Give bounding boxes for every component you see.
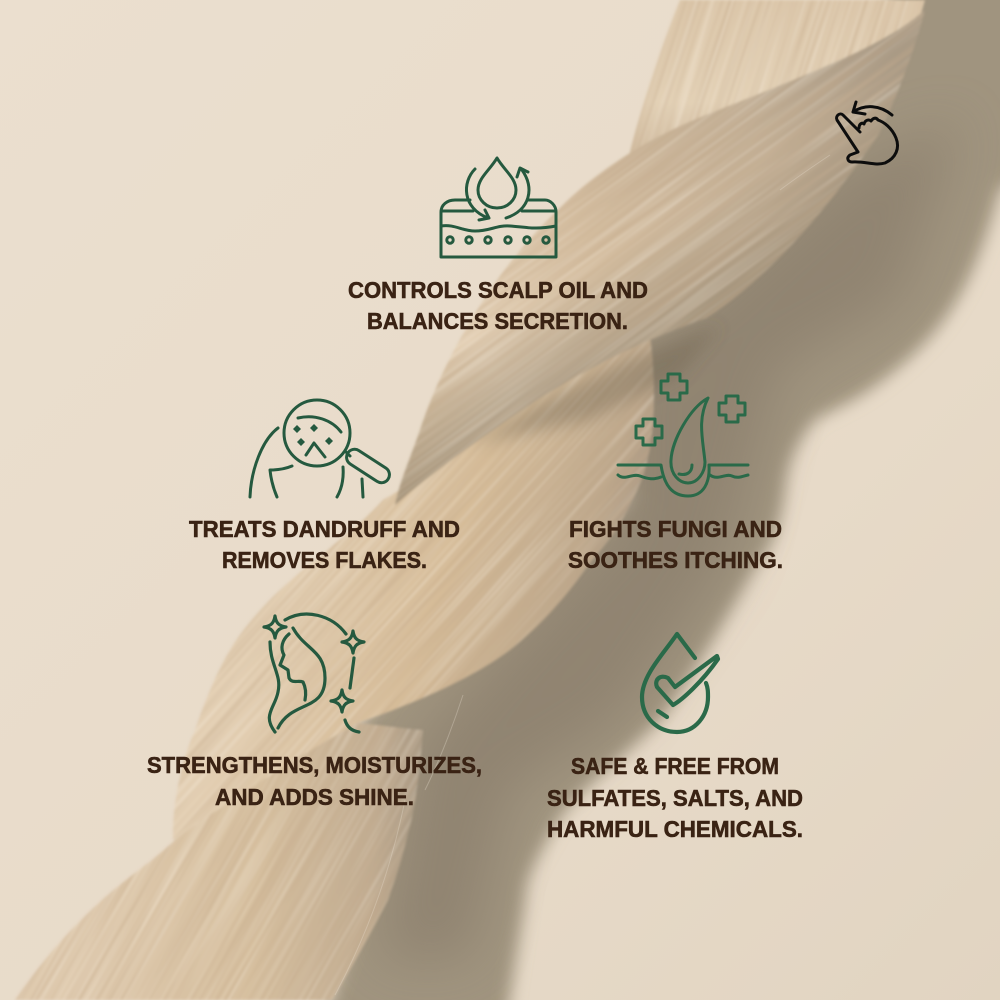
strand: top (628, 0, 925, 160)
shadow cast by diagonal band (470, 325, 720, 445)
icon: magnifier over scalp (250, 400, 392, 497)
text: fungi (568, 516, 783, 573)
text: safe and free: SAFE & FREE FROM (571, 753, 779, 779)
icon: woman profile with sparkles (264, 614, 364, 732)
icon: hair follicle with crosses (618, 374, 748, 496)
stray hair highlights (335, 155, 830, 995)
text: fungi: SOOTHES ITCHING. (568, 547, 783, 573)
text: strengthens: STRENGTHENS, MOISTURIZES, (147, 752, 482, 778)
text: fungi: FIGHTS FUNGI AND (569, 516, 782, 542)
strand: diagonal band (395, 10, 925, 505)
icon: drop with check (642, 634, 718, 732)
text: strengthens (147, 752, 482, 810)
text: safe and free: SULFATES, SALTS, AND (547, 785, 803, 811)
text: dandruff: REMOVES FLAKES. (222, 547, 427, 573)
hair shadow (320, 0, 1000, 1000)
text: dandruff (189, 516, 460, 573)
text: dandruff: TREATS DANDRUFF AND (189, 516, 460, 542)
text: safe and free (547, 753, 803, 842)
icon: swipe hand (837, 102, 898, 164)
strand: middle (173, 335, 654, 840)
text: safe and free: HARMFUL CHEMICALS. (547, 816, 803, 842)
heading: scalp oil (348, 277, 648, 334)
heading: scalp oil: BALANCES SECRETION. (367, 308, 628, 334)
heading: scalp oil: CONTROLS SCALP OIL AND (348, 277, 648, 303)
icon: scalp with oil drop (441, 158, 556, 257)
text: strengthens: AND ADDS SHINE. (215, 784, 414, 810)
strand: bottom (15, 723, 423, 1000)
